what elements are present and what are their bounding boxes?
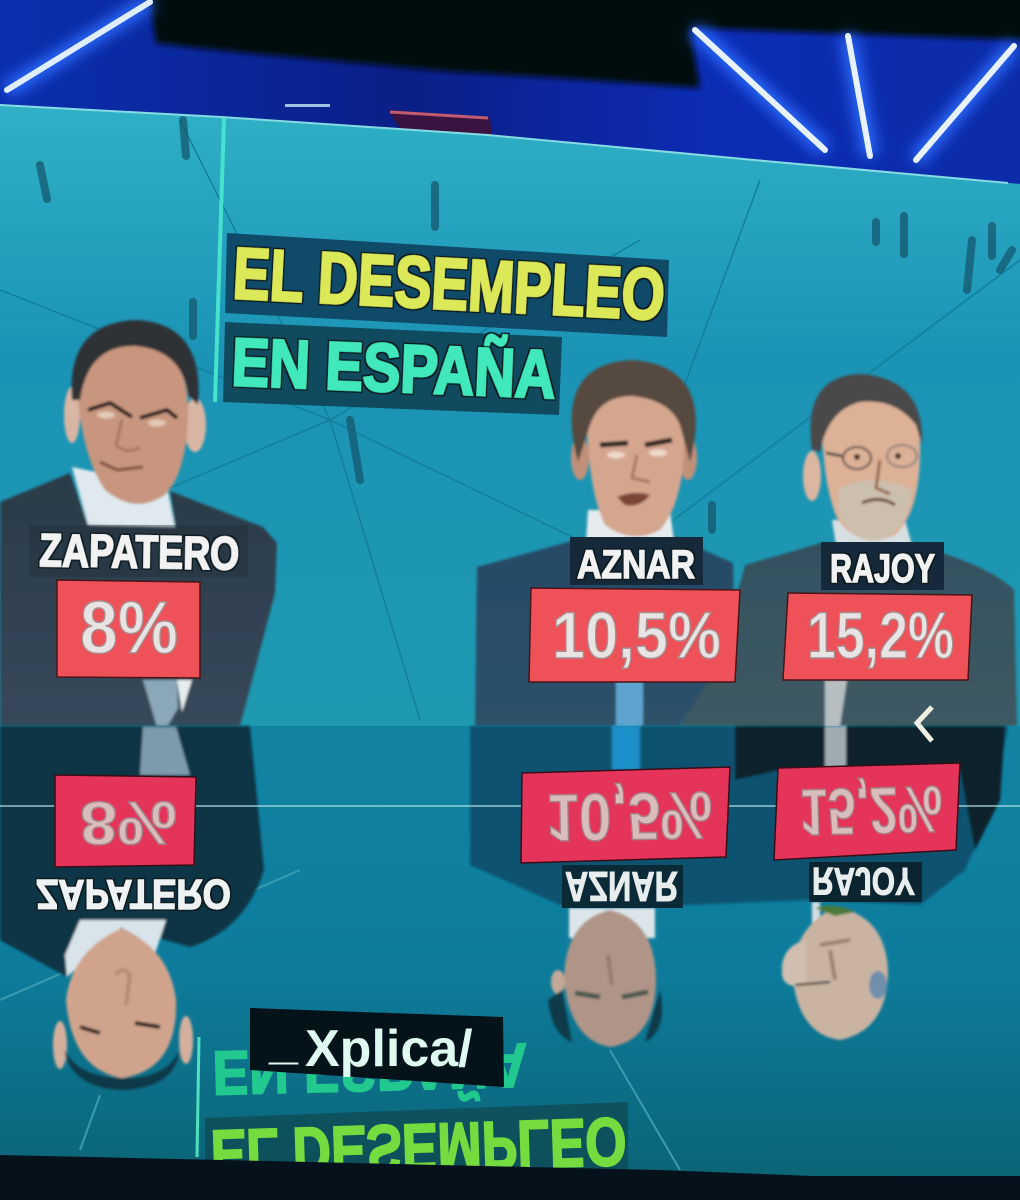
name: Zapatero: ZAPATERO <box>39 524 240 579</box>
label: Aznar 10,5% <box>529 537 740 682</box>
logo: Xplica <box>250 1008 504 1087</box>
reflected name: Rajoy: RAJOY <box>812 859 915 902</box>
reflected value: 15,2%: 15,2% <box>799 772 944 850</box>
reflected title <box>197 1030 628 1192</box>
person: Rajoy <box>680 374 1017 770</box>
reflective floor <box>0 726 1020 1176</box>
value: 8%: 8% <box>80 586 178 669</box>
value: 8% <box>57 580 200 678</box>
reflection: Aznar and Rajoy suits <box>470 726 1008 905</box>
reflected value: 8%: 8% <box>80 789 177 857</box>
reflection: Aznar <box>548 908 662 1047</box>
name: Rajoy: RAJOY <box>830 547 935 591</box>
reflected value: 8% <box>55 775 196 867</box>
reflection: Rajoy <box>782 902 888 1040</box>
reflected name: Zapatero: ZAPATERO <box>36 871 231 918</box>
title <box>223 233 669 415</box>
icon: arrow marker <box>917 707 932 741</box>
studio wall background <box>0 105 1020 730</box>
title line 2: en España: EN ESPAÑA <box>230 324 557 413</box>
top studio ceiling <box>0 0 1020 195</box>
reflected value: 15,2% <box>774 763 960 860</box>
reflection: Zapatero <box>0 726 264 1090</box>
value: 15,2%: 15,2% <box>807 598 954 672</box>
label: Zapatero 8% <box>30 524 248 678</box>
value: 10,5%: 10,5% <box>552 598 721 672</box>
floor reflection line <box>0 805 1020 807</box>
reflected title: EL DESEMPLEO <box>210 1103 628 1192</box>
title line 1: El desempleo: EL DESEMPLEO <box>231 234 667 336</box>
reflected name: Aznar: AZNAR <box>565 863 678 910</box>
logo: Xplica: _ <box>268 1012 299 1070</box>
reflected title: EN ESPAÑA <box>212 1030 528 1107</box>
vertical accent line <box>215 118 224 402</box>
person: Zapatero <box>0 320 277 727</box>
bottom screen bezel <box>0 1155 1020 1200</box>
reflected value: 10,5%: 10,5% <box>546 777 713 855</box>
value: 15,2% <box>783 593 972 680</box>
label: Rajoy 15,2% <box>783 542 972 680</box>
reflected value: 10,5% <box>521 767 730 863</box>
name: Aznar: AZNAR <box>577 543 695 587</box>
logo: Xplica: Xplica/ <box>305 1020 473 1078</box>
person: Aznar <box>475 360 735 728</box>
value: 10,5% <box>529 588 740 682</box>
